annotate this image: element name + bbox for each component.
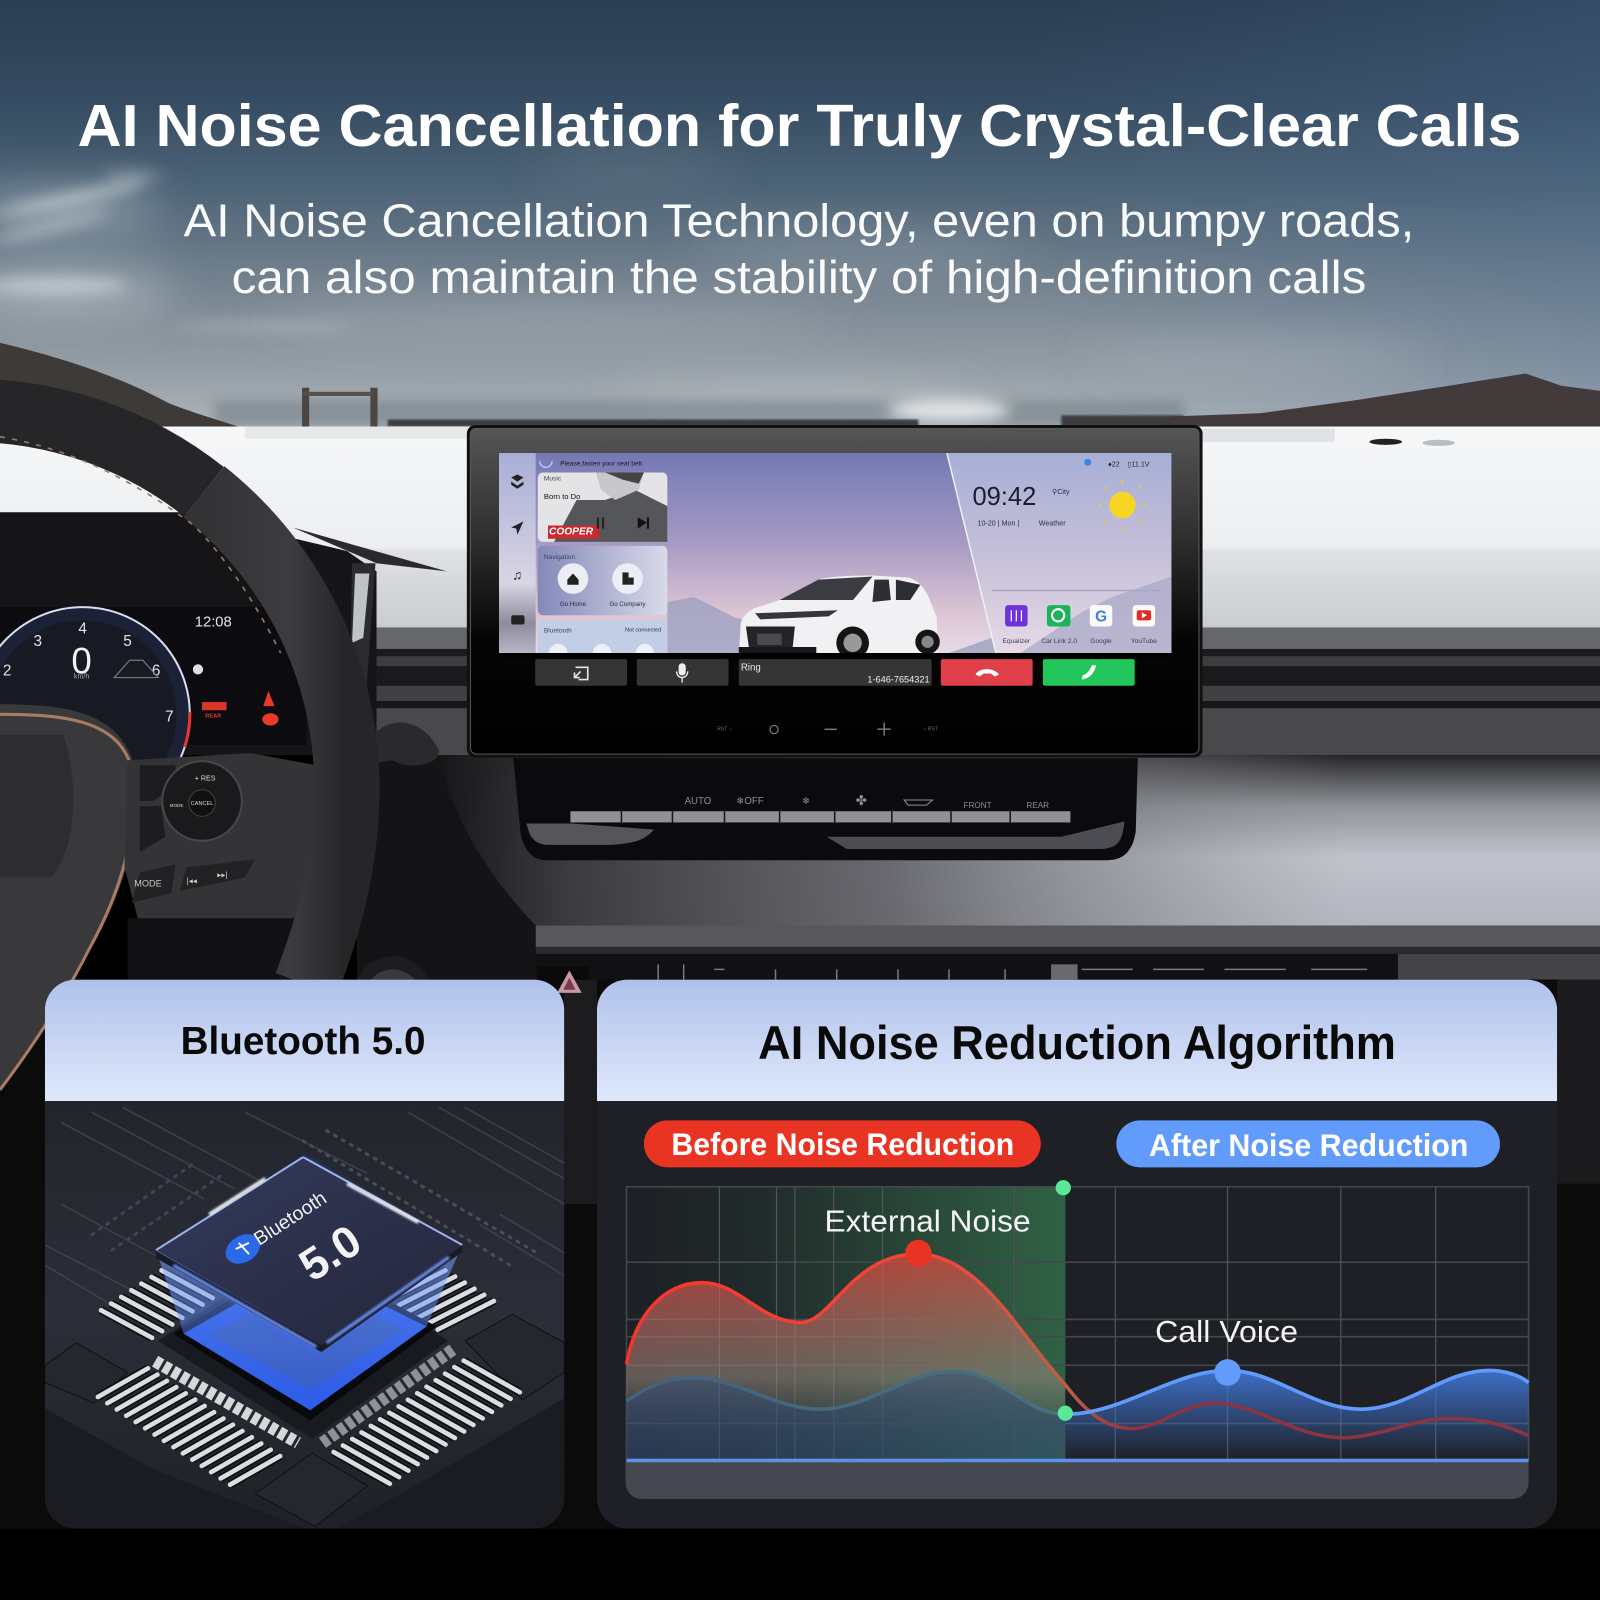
left voice area	[627, 1371, 1065, 1460]
button: answer	[1043, 659, 1135, 686]
app shortcuts: Equalizer	[1003, 638, 1031, 645]
bluetooth card: Bluetooth	[544, 628, 572, 635]
subtitle: can also maintain the stability of high-definition calls	[232, 251, 1366, 303]
speedometer gauge	[0, 607, 190, 821]
physical screen buttons: RST ○	[717, 727, 732, 733]
panel: AI Noise Reduction Algorithm	[597, 980, 1557, 1529]
app shortcuts: Car Link 2.0	[1041, 638, 1077, 645]
subtitle: AI Noise Cancellation Technology, even on bumpy roads,	[184, 195, 1414, 247]
label: external noise: External Noise	[824, 1205, 1031, 1239]
marker: external noise	[905, 1240, 932, 1266]
music card: COOPER	[549, 527, 594, 538]
climate control panel: ❄	[802, 796, 810, 807]
light beams	[156, 1245, 462, 1410]
lower dashboard	[357, 755, 1600, 980]
sidebar: ♫	[512, 568, 522, 583]
instrument cluster hood	[0, 512, 447, 755]
seat belt notice: Please,fasten your seat belt	[560, 460, 642, 467]
marker: top of highlight	[1056, 1180, 1071, 1195]
right info panel	[947, 453, 1171, 653]
call voice area	[1065, 1370, 1529, 1460]
steering wheel spoke with controls: MODE	[170, 803, 183, 808]
circuit board	[45, 1101, 564, 1529]
right info panel: Weather	[1039, 520, 1066, 528]
climate control panel	[513, 758, 1138, 860]
marker: call voice	[1214, 1359, 1241, 1386]
panel: Bluetooth 5.0	[45, 980, 564, 1529]
right info panel: 09:42	[972, 483, 1036, 511]
incoming call number: 1-646-7654321	[867, 675, 930, 685]
steering wheel spoke with controls	[124, 753, 327, 980]
left hill	[0, 343, 245, 429]
steering wheel hub	[0, 704, 137, 1097]
label: call voice: Call Voice	[1155, 1315, 1298, 1349]
navigation card	[538, 546, 667, 615]
app shortcuts: G	[1095, 608, 1107, 625]
app shortcuts: Google	[1090, 638, 1112, 645]
panel header: AI Noise Reduction Algorithm	[758, 1017, 1396, 1069]
climate control panel: AUTO	[685, 796, 712, 807]
music card	[538, 472, 667, 542]
red noise curve	[627, 1254, 1529, 1438]
physical screen buttons: ○ RST	[923, 727, 938, 733]
label: after noise reduction: After Noise Reduction	[1149, 1127, 1468, 1163]
reduction highlight	[726, 1188, 1066, 1459]
app shortcuts: YouTube	[1131, 638, 1157, 645]
speedometer gauge: 0	[71, 640, 92, 681]
baseline	[627, 1459, 1529, 1462]
blue voice curve	[627, 1370, 1529, 1414]
climate control panel: ❄OFF	[736, 796, 764, 807]
wallpaper hills	[667, 597, 995, 653]
speedometer gauge: 2	[3, 663, 11, 680]
steering wheel spoke with controls: CANCEL	[191, 801, 213, 807]
speedometer gauge: 7	[165, 708, 174, 725]
label: before noise reduction: Before Noise Reduction	[671, 1126, 1014, 1162]
cluster clock and warning icons	[193, 615, 279, 726]
cluster clock and warning icons: 12:08	[195, 615, 232, 631]
panel header	[597, 980, 1557, 1101]
floating chip: 5.0	[290, 1214, 370, 1291]
steering wheel spoke with controls: MODE	[134, 879, 162, 889]
marker: crossover	[1058, 1406, 1073, 1421]
incoming call number: Ring	[741, 662, 761, 673]
package base	[45, 1398, 564, 1529]
navigation card: Navigation	[544, 554, 575, 561]
steering wheel spoke with controls: |◂◂	[187, 877, 197, 886]
speedometer gauge: 5	[123, 633, 132, 650]
floating chip	[156, 1157, 462, 1352]
speedometer gauge: 3	[33, 633, 42, 650]
engine start button	[354, 956, 432, 1034]
speedometer gauge: km/h	[74, 673, 89, 681]
turn signal stalk	[373, 722, 439, 766]
floating chip: Bluetooth	[250, 1187, 331, 1250]
button: microphone	[637, 659, 729, 686]
music card: Music	[544, 476, 562, 483]
head unit launcher screen	[499, 453, 1171, 662]
steering wheel spoke with controls: + RES	[195, 775, 216, 783]
small side chips	[45, 1314, 564, 1527]
bottom dark floor	[0, 980, 1600, 1600]
navigation card: Go Company	[610, 601, 646, 608]
chip socket	[152, 1296, 456, 1448]
white dashboard top	[0, 427, 1600, 628]
label: before noise reduction	[644, 1120, 1041, 1167]
incoming call number	[739, 659, 932, 686]
button: switch screen	[535, 659, 627, 686]
hazard button	[538, 966, 589, 993]
cluster clock and warning icons: REAR	[205, 713, 221, 719]
bluetooth card	[538, 620, 668, 653]
sidebar	[499, 453, 536, 653]
climate control panel: FRONT	[964, 801, 992, 810]
steering wheel rim	[0, 410, 347, 985]
label: after noise reduction	[1116, 1120, 1500, 1167]
external noise area	[626, 1256, 1066, 1430]
contact leads	[98, 1270, 520, 1485]
subtitle	[184, 195, 1414, 303]
right info panel: ▯11.1V	[1128, 460, 1150, 468]
sky with clouds	[0, 0, 1600, 429]
speedometer gauge: 6	[152, 663, 160, 680]
bluetooth card: Not connected	[625, 628, 661, 634]
dashboard dark trim bands	[357, 628, 1600, 755]
chart grid	[627, 1187, 1529, 1460]
main title: AI Noise Cancellation for Truly Crystal-Clear Calls	[78, 92, 1521, 159]
panel header	[45, 980, 564, 1101]
head unit frame	[468, 427, 1201, 756]
navigation card: Go Home	[560, 601, 587, 608]
distant haze and fence	[214, 388, 1184, 427]
button: hang up	[941, 659, 1033, 686]
climate control panel: REAR	[1026, 801, 1049, 810]
speedometer gauge: 4	[78, 621, 87, 638]
music card: Born to Do	[544, 492, 580, 501]
right info panel: 10-20 | Mon |	[978, 520, 1019, 528]
right info panel: ♦22	[1108, 460, 1120, 468]
call control bar	[499, 653, 1171, 686]
physical screen buttons	[717, 722, 938, 736]
app shortcuts	[1003, 605, 1157, 645]
steering wheel spoke with controls: ▸▸|	[217, 871, 228, 880]
panel header: Bluetooth 5.0	[181, 1020, 426, 1063]
noise chart	[626, 1180, 1529, 1499]
car image	[739, 576, 940, 659]
right hill	[1143, 373, 1600, 434]
right info panel: ⚲City	[1052, 488, 1070, 496]
climate control panel: ✤	[856, 793, 867, 808]
chart footer band	[626, 1460, 1529, 1499]
